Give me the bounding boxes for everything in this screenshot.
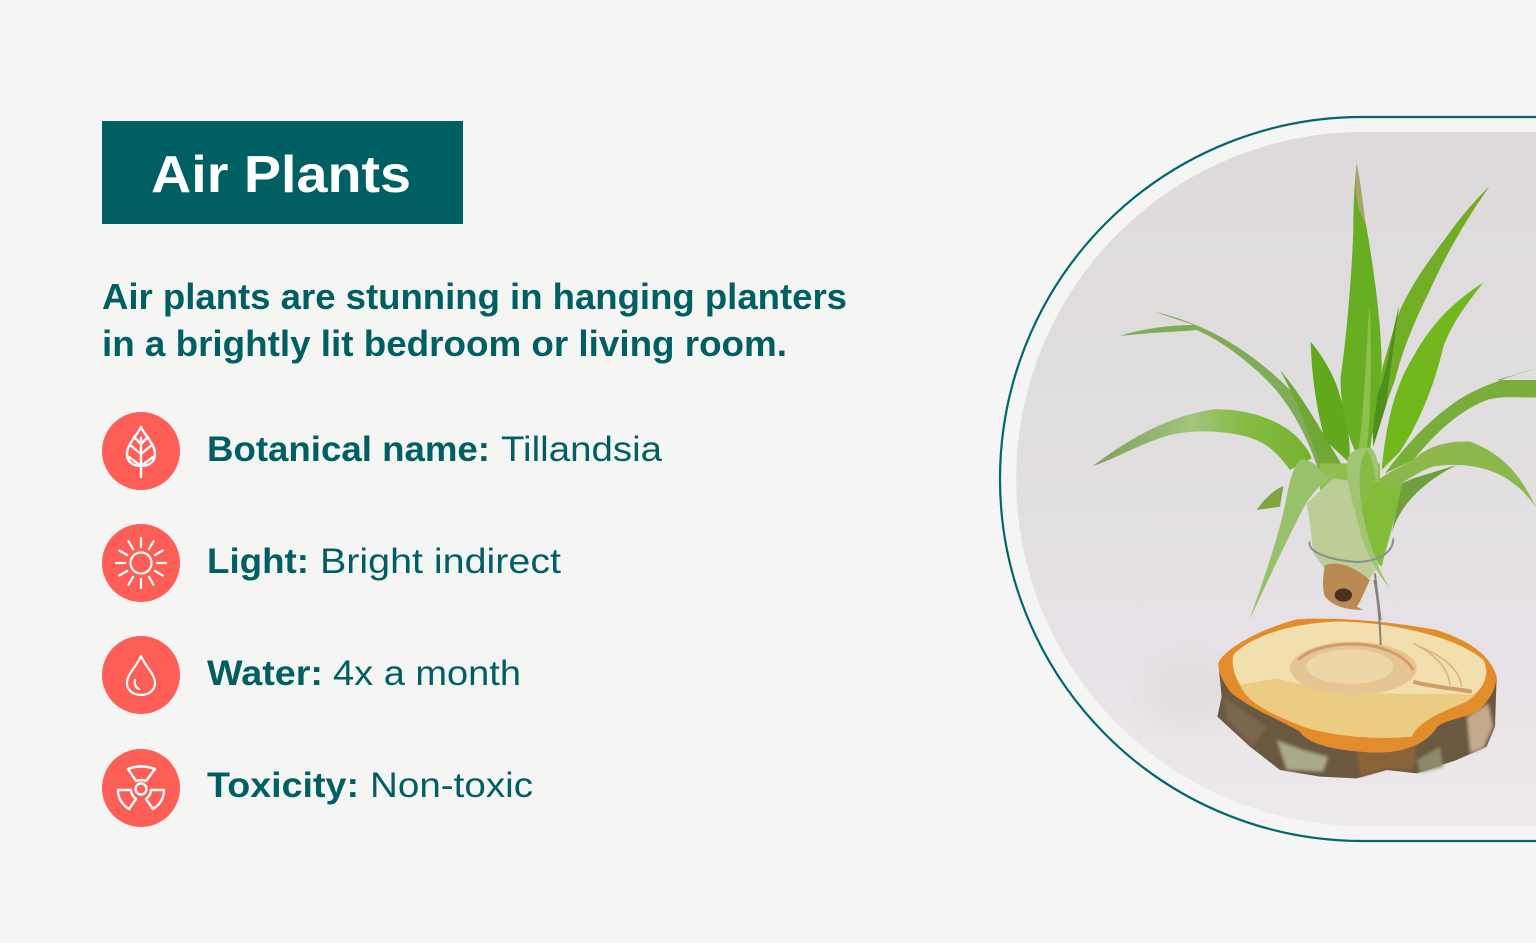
icon: sun	[102, 524, 180, 602]
label: 4x a month	[333, 654, 521, 693]
label	[207, 654, 521, 693]
icon: water drop	[102, 636, 180, 714]
table shadow	[1140, 650, 1240, 730]
label: Non-toxic	[370, 766, 533, 805]
outline arc around photo	[1000, 117, 1536, 841]
air plant	[1093, 163, 1536, 620]
label: Botanical name:	[207, 430, 490, 469]
icon: leaf	[102, 412, 180, 490]
row: water	[102, 636, 521, 714]
label: Tillandsia	[501, 430, 663, 469]
bark side	[1217, 663, 1497, 778]
wood slice	[1217, 580, 1497, 778]
label: Bright indirect	[320, 542, 561, 581]
intro text: Air plants are stunning in hanging planters	[102, 276, 847, 317]
row: toxicity	[102, 749, 533, 827]
label: Toxicity:	[207, 766, 359, 805]
label	[207, 766, 533, 805]
wire ring	[1310, 538, 1393, 562]
title banner	[102, 121, 463, 224]
intro text: in a brightly lit bedroom or living room.	[102, 323, 787, 364]
label	[207, 430, 663, 469]
orange rim	[1218, 619, 1497, 753]
intro text	[102, 276, 847, 364]
row: light	[102, 524, 561, 602]
row: botanical name	[102, 412, 663, 490]
icon: radiation	[102, 749, 180, 827]
label: Light:	[207, 542, 309, 581]
top face	[1233, 622, 1486, 738]
label	[207, 542, 561, 581]
photo: air plant on wood slice	[1000, 120, 1536, 840]
title banner: Air Plants	[151, 146, 411, 204]
label: Water:	[207, 654, 323, 693]
root	[1323, 564, 1370, 610]
